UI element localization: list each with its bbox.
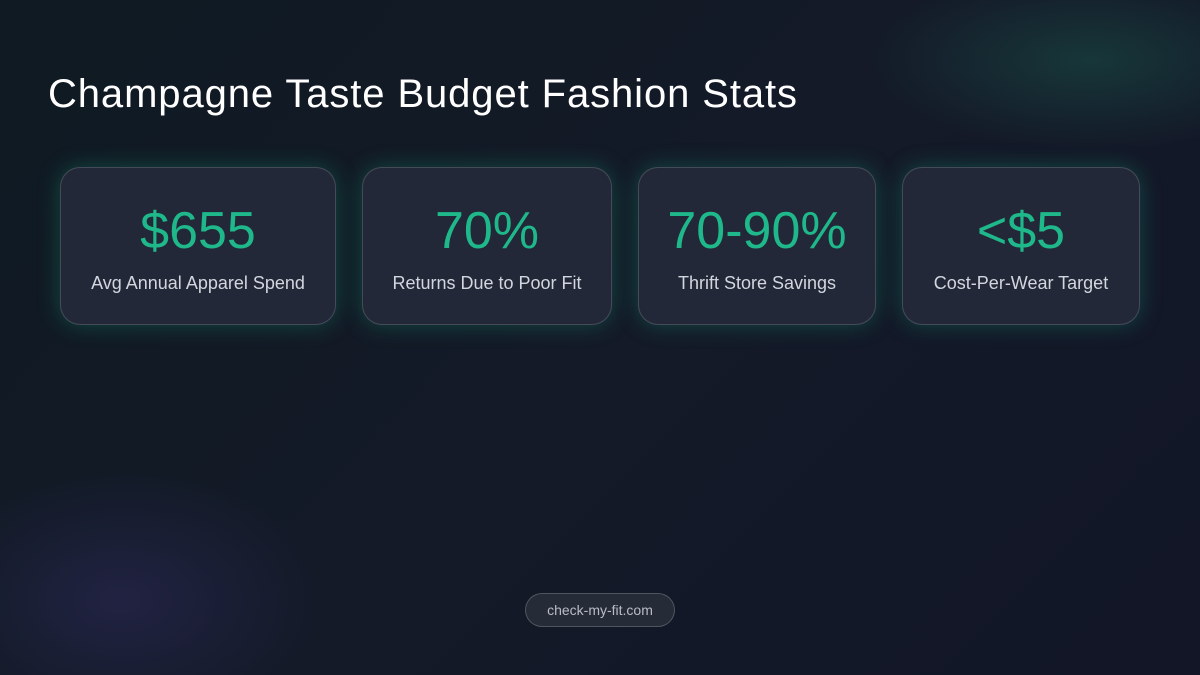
card: cost per wear: <$5	[977, 202, 1065, 260]
footer pill	[525, 593, 675, 627]
card: annual spend: $655	[140, 202, 256, 260]
card: cost per wear	[902, 167, 1140, 325]
card: annual spend: Avg Annual Apparel Spend	[91, 273, 305, 293]
card: thrift savings: Thrift Store Savings	[678, 273, 836, 293]
card: returns	[362, 167, 612, 325]
card: returns: Returns Due to Poor Fit	[392, 273, 582, 293]
card: cost per wear: Cost-Per-Wear Target	[934, 273, 1108, 293]
title: Champagne Taste Budget Fashion Stats	[48, 72, 798, 116]
card: thrift savings: 70-90%	[667, 202, 847, 260]
card: annual spend	[60, 167, 336, 325]
footer pill: check-my-fit.com	[547, 602, 653, 618]
card: returns: 70%	[435, 202, 539, 260]
card: thrift savings	[638, 167, 876, 325]
